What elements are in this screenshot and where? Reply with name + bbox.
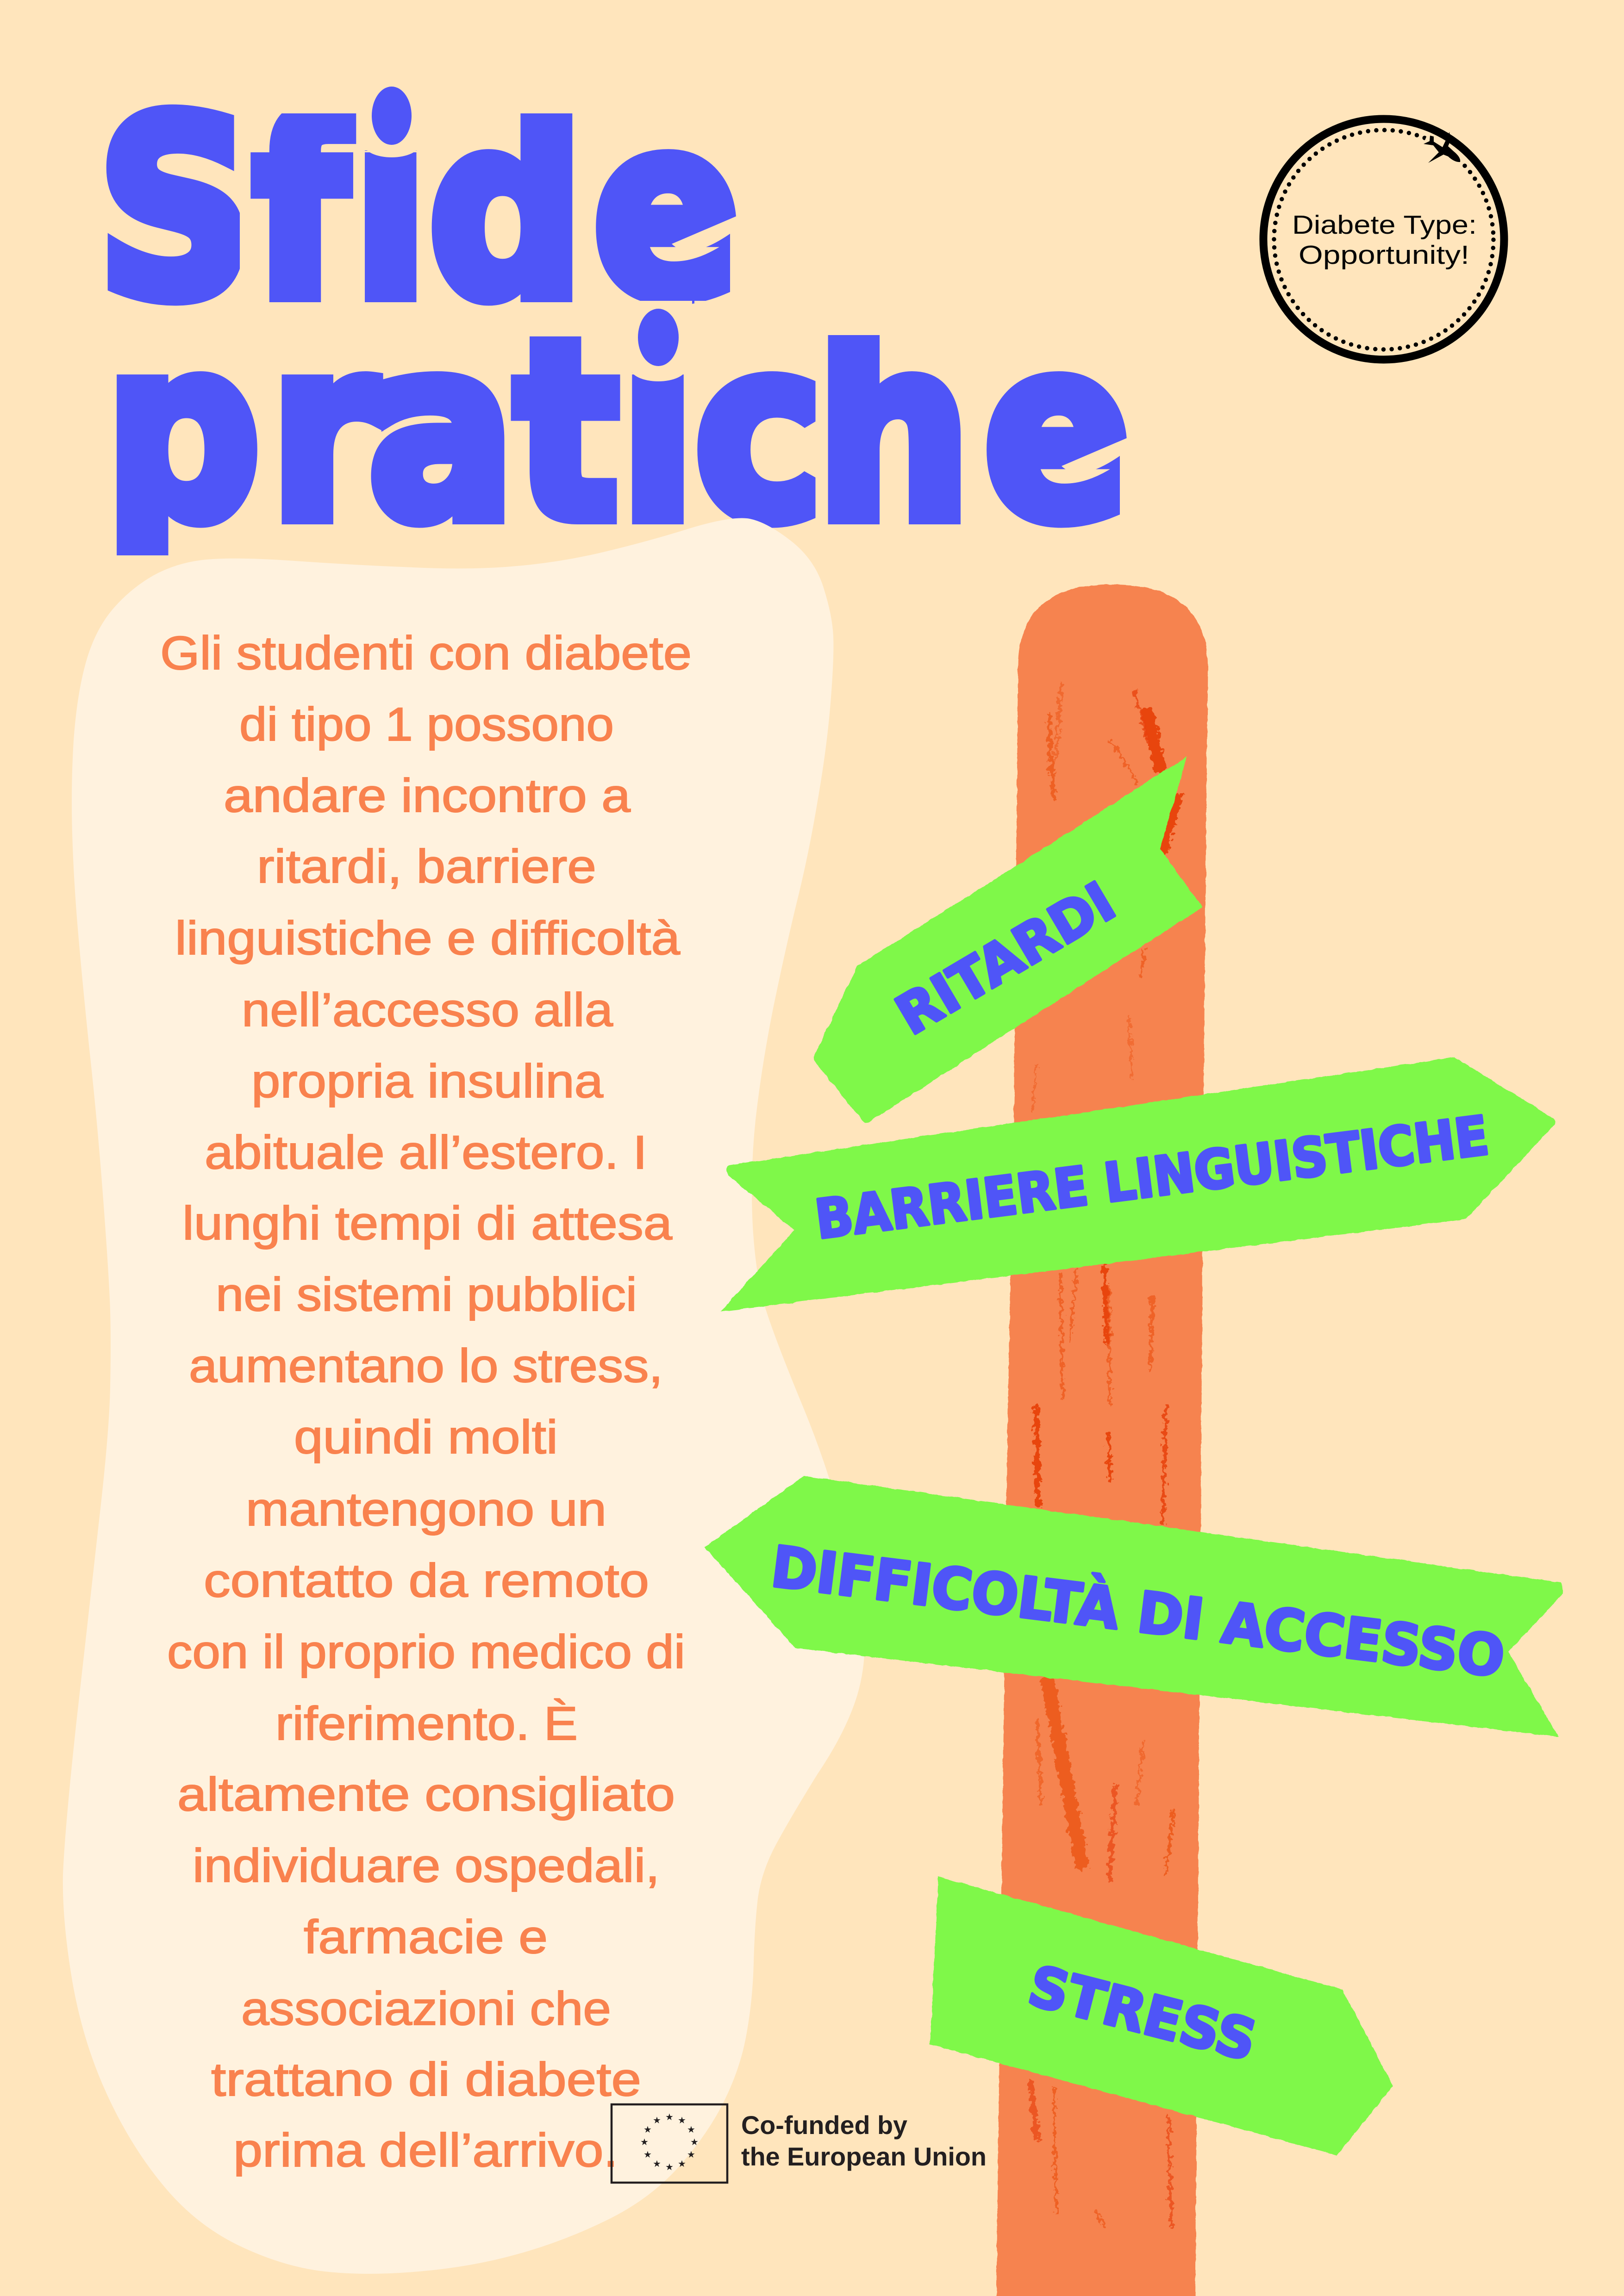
icon: EU stars: ★★★★★★★★★★★★ [640,2111,699,2172]
body text: lunghi tempi di attesa [182,1197,672,1250]
body text: andare incontro a [224,769,631,822]
body text: linguistiche e difficoltà [175,912,680,964]
panel: text blob [63,518,865,2274]
label: barriere linguistiche: BARRIERE LINGUISTICHE [812,1104,1492,1251]
body text: contatto da remoto [204,1554,649,1607]
body text: associazioni che [241,1982,611,2035]
logo text: Co-funded by [741,2110,907,2140]
badge: Diabete Type Opportunity [1263,119,1504,360]
logo: EU co-funded [612,2104,987,2183]
label: ritardi: RITARDI [885,870,1126,1047]
badge text [1292,210,1477,270]
body text: di tipo 1 possono [239,698,614,751]
body text: farmacie e [304,1910,548,1963]
body text: individuare ospedali, [193,1839,660,1892]
body text: mantengono un [246,1483,606,1536]
body text: nell’accesso alla [242,983,613,1036]
body text: nei sistemi pubblici [216,1268,637,1321]
title: pratiche [106,289,1131,574]
body text: con il proprio medico di [167,1625,685,1678]
body text: altamente consigliato [177,1768,675,1821]
badge text: Opportunity! [1299,240,1469,270]
body text: Gli studenti con diabete [160,627,692,679]
sign: stress [930,1877,1393,2155]
sign: barriere linguistiche [720,1057,1555,1312]
signpost [996,585,1208,2296]
logo text [741,2110,987,2171]
label: stress: STRESS [1022,1954,1263,2074]
body text: riferimento. È [275,1697,578,1750]
logo text: the European Union [741,2142,987,2171]
icon: airplane [1424,132,1460,163]
body text: abituale all’estero. I [205,1126,647,1179]
label: difficolta di accesso: DIFFICOLTÀ DI ACCESSO [768,1534,1508,1690]
sign: ritardi [814,756,1202,1122]
body text: prima dell’arrivo. [233,2124,618,2177]
body text: propria insulina [251,1055,603,1108]
badge text: Diabete Type: [1292,210,1477,240]
title [98,67,1140,583]
body text: quindi molti [294,1411,558,1463]
body text: aumentano lo stress, [189,1339,663,1392]
body text [160,627,692,2177]
title: Sfide [98,67,740,352]
sign: difficolta di accesso [705,1476,1563,1737]
body text: ritardi, barriere [257,840,596,893]
body text: trattano di diabete [211,2053,641,2106]
